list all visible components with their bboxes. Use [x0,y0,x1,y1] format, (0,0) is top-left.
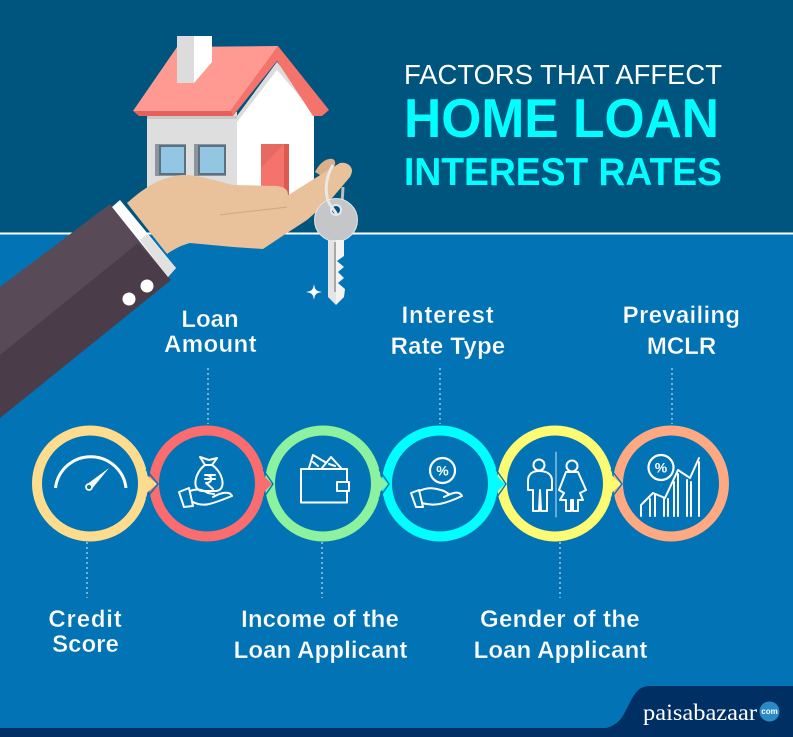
chimney [177,36,194,83]
ring: credit score [37,430,158,536]
label: prevailing MCLR: Prevailing [623,302,740,329]
ring: gender of the loan applicant [502,430,622,536]
icon: speedometer [56,457,126,490]
icon: percent and growth bars [641,455,699,516]
icon: open hand [411,488,462,507]
ring: income of the loan applicant [270,430,389,536]
illustration: suit sleeve with cuff [0,200,176,418]
dotted connectors [87,368,672,598]
label: income of the loan applicant: Loan Applicant [234,637,407,664]
label: credit score: Credit [48,606,123,633]
label: income of the loan applicant: Income of the [241,606,399,633]
icon: wallet with cash [301,455,349,502]
label: interest rate type: Interest [401,302,495,329]
label: loan amount: Loan [181,306,239,333]
bottom background panel [0,233,793,737]
title [404,59,722,194]
ring: prevailing MCLR [618,430,724,536]
label: credit score: Score [52,631,119,658]
label: gender of the loan applicant: Gender of the [480,606,640,633]
illustration: hand holding house [127,159,352,254]
icon: percent coin [430,458,455,483]
label: prevailing MCLR: MCLR [647,333,716,360]
ring: interest rate type [387,430,506,536]
icon: percent over hand [411,458,462,507]
illustration: house [133,36,329,196]
door [261,144,289,196]
windows [155,144,186,176]
title line: interest rates: INTEREST RATES [404,151,722,194]
icon: percent over hand: % [436,462,449,478]
top background panel [0,0,793,233]
ring: loan amount [154,430,273,536]
label: loan amount: Amount [164,331,257,358]
title line: factors that affect: FACTORS THAT AFFECT [404,59,722,90]
label: gender of the loan applicant: Loan Applicant [474,637,647,664]
logo .com badge [760,702,780,722]
footer bar with logo [0,686,793,737]
title line: home loan: HOME LOAN [404,87,719,149]
logo .com badge: com [761,707,778,716]
icon: money bag in hand [179,457,232,507]
illustration: key and sparkle [306,165,358,305]
icon: man and woman [528,452,586,517]
label: interest rate type: Rate Type [391,333,505,360]
icon: percent and growth bars: % [655,460,668,476]
logo wordmark: paisabazaar [643,700,757,725]
